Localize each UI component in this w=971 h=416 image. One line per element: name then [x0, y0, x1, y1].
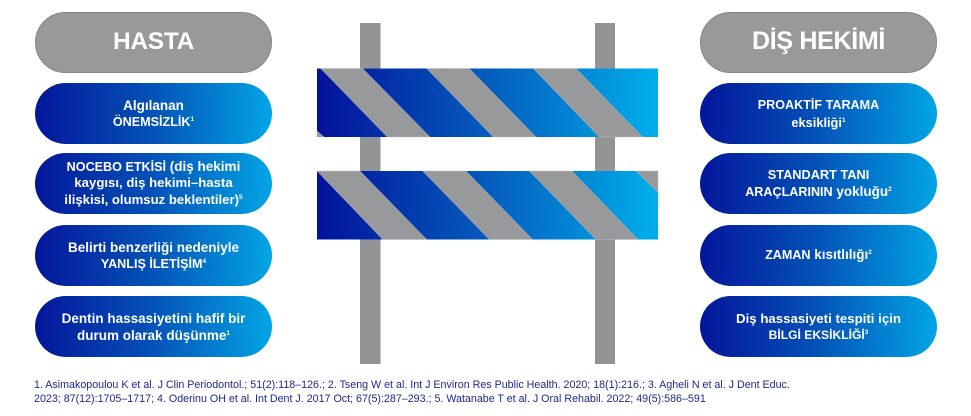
- heading: DİŞ HEKİMİ: [700, 12, 937, 73]
- barrier: nocebo etkisi: kaygısı, diş hekimi–hasta: [74, 175, 233, 190]
- barrier: algılanan önemsizlik: Algılanan: [123, 98, 184, 113]
- barrier: hafif durum olarak düşünme: durum olarak düşünme1: [77, 328, 230, 342]
- left post: [360, 23, 380, 364]
- barrier: standart tanı araçları: STANDART TANI: [768, 167, 869, 182]
- heading: DİŞ HEKİMİ: DİŞ HEKİMİ: [752, 27, 885, 55]
- barrier: bilgi eksikliği: BİLGİ EKSİKLİĞİ3: [769, 328, 868, 342]
- references: [34, 379, 790, 404]
- barrier: proaktif tarama eksikliği: PROAKTİF TARAMA: [758, 98, 879, 112]
- barrier: yanlış iletişim: [35, 224, 272, 286]
- barrier: nocebo etkisi: [35, 153, 272, 214]
- heading: HASTA: [35, 12, 272, 73]
- barrier: proaktif tarama eksikliği: [700, 83, 937, 144]
- right post: [595, 23, 615, 364]
- heading: HASTA: HASTA: [113, 28, 194, 55]
- references: 1. Asimakopoulou K et al. J Clin Periodontol.; 51(2):118–126.; 2. Tseng W et al. Int J Environ Res Public Health. 2020; 18(1):216.; 3. Agheli N et al. J Dent Educ.: [34, 379, 790, 391]
- barrier: algılanan önemsizlik: ÖNEMSİZLİK1: [113, 115, 194, 129]
- barrier: algılanan önemsizlik: [35, 83, 272, 144]
- barrier: nocebo etkisi: NOCEBO ETKİSİ (diş hekimi: [67, 159, 240, 174]
- barrier: hafif durum olarak düşünme: Dentin hassasiyetini hafif bir: [62, 310, 245, 326]
- barrier: zaman kısıtlılığı: ZAMAN kısıtlılığı2: [765, 246, 872, 262]
- references: 2023; 87(12):1705–1717; 4. Oderinu OH et al. Int Dent J. 2017 Oct; 67(5):287–293.; 5. Watanabe T et al. J Oral Rehabil. 2022; 49(5):586–591: [34, 392, 706, 404]
- barrier: bilgi eksikliği: Diş hassasiyeti tespiti için: [736, 310, 901, 326]
- barrier: zaman kısıtlılığı: [700, 224, 937, 286]
- barrier: proaktif tarama eksikliği: eksikliği1: [791, 115, 846, 130]
- barrier: standart tanı araçları: [700, 153, 937, 214]
- barrier: yanlış iletişim: Belirti benzerliği nedeniyle: [68, 240, 239, 254]
- barrier: bilgi eksikliği: [700, 296, 937, 357]
- top barrier bar: [317, 68, 658, 137]
- barrier: nocebo etkisi: ilişkisi, olumsuz beklentiler)5: [64, 192, 243, 207]
- barrier: standart tanı araçları: ARAÇLARININ yokluğu2: [745, 184, 892, 198]
- barrier: hafif durum olarak düşünme: [35, 296, 272, 357]
- bottom barrier bar: [317, 171, 658, 240]
- barrier: yanlış iletişim: YANLIŞ İLETİŞİM4: [101, 256, 206, 270]
